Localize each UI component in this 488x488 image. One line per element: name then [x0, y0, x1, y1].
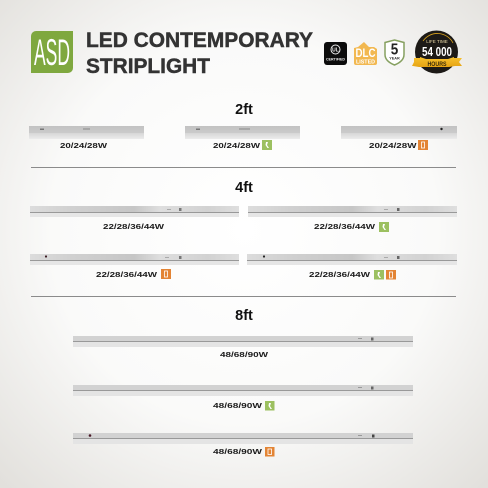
logo: ASD: ASD	[34, 32, 70, 73]
fixture: 8ft sensor	[73, 385, 413, 396]
label: 8ft plain: 48/68/90W	[220, 350, 269, 359]
label: 4ft sensor: 22/28/36/44W	[314, 222, 376, 231]
label: 2ft plain: 20/24/28W	[60, 141, 108, 150]
divider	[31, 167, 456, 168]
icon: green sensor	[379, 222, 389, 232]
fixture: 2ft emergency	[341, 126, 457, 139]
fixture: 4ft sensor and emergency	[247, 254, 457, 265]
fixture: 4ft emergency	[30, 254, 239, 265]
badge: UL certified: UL	[332, 48, 339, 54]
badge: UL certified: CERTIFIED	[326, 58, 345, 62]
badge: lifetime 54 000 hours: HOURS	[428, 62, 446, 68]
icon: green sensor	[374, 270, 384, 280]
label: 8ft sensor: 48/68/90W	[213, 401, 263, 410]
label: 2ft emergency: 20/24/28W	[369, 141, 418, 150]
icon: green sensor	[262, 140, 272, 150]
badge: DLC listed	[354, 42, 377, 66]
fixture: 2ft plain	[29, 126, 144, 139]
heading: 4ft: 4ft	[235, 180, 253, 196]
heading: 2ft: 2ft	[235, 102, 253, 118]
label: 4ft plain: 22/28/36/44W	[103, 222, 165, 231]
icon: green sensor	[265, 401, 274, 410]
label: 4ft emergency: 22/28/36/44W	[96, 270, 158, 279]
badge: 5 year warranty	[385, 40, 404, 65]
badge: 5 year warranty: YEAR	[389, 56, 400, 60]
title	[86, 29, 313, 78]
badge: DLC listed: LISTED	[356, 60, 375, 66]
section: 4ft	[30, 180, 457, 280]
fixture: 2ft sensor	[185, 126, 300, 139]
icon: orange battery	[418, 140, 428, 150]
icon: orange battery	[161, 269, 171, 279]
section: 2ft	[29, 102, 457, 150]
badge: lifetime 54 000 hours	[412, 30, 462, 74]
fixture: 4ft plain	[30, 206, 239, 217]
icon: orange battery	[386, 270, 396, 280]
badge: lifetime 54 000 hours: 54 000	[422, 44, 452, 59]
icon: orange battery	[265, 447, 274, 456]
logo: ASD	[31, 31, 73, 73]
badge: DLC listed: DLC	[356, 46, 376, 60]
badge: UL certified	[324, 42, 347, 65]
label: 4ft sensor and emergency: 22/28/36/44W	[309, 270, 371, 279]
label: 2ft sensor: 20/24/28W	[213, 141, 261, 150]
fixture: 4ft sensor	[248, 206, 457, 217]
badge: lifetime 54 000 hours: LIFE TIME	[426, 39, 448, 44]
divider	[31, 296, 456, 297]
badge: 5 year warranty: 5	[391, 42, 398, 58]
label: 8ft emergency: 48/68/90W	[213, 447, 263, 456]
fixture: 8ft plain	[73, 336, 413, 347]
heading: 8ft: 8ft	[235, 308, 253, 324]
title: LED CONTEMPORARY	[86, 29, 313, 52]
title: STRIPLIGHT	[86, 55, 210, 78]
section: 8ft	[73, 308, 413, 456]
fixture: 8ft emergency	[73, 433, 413, 444]
